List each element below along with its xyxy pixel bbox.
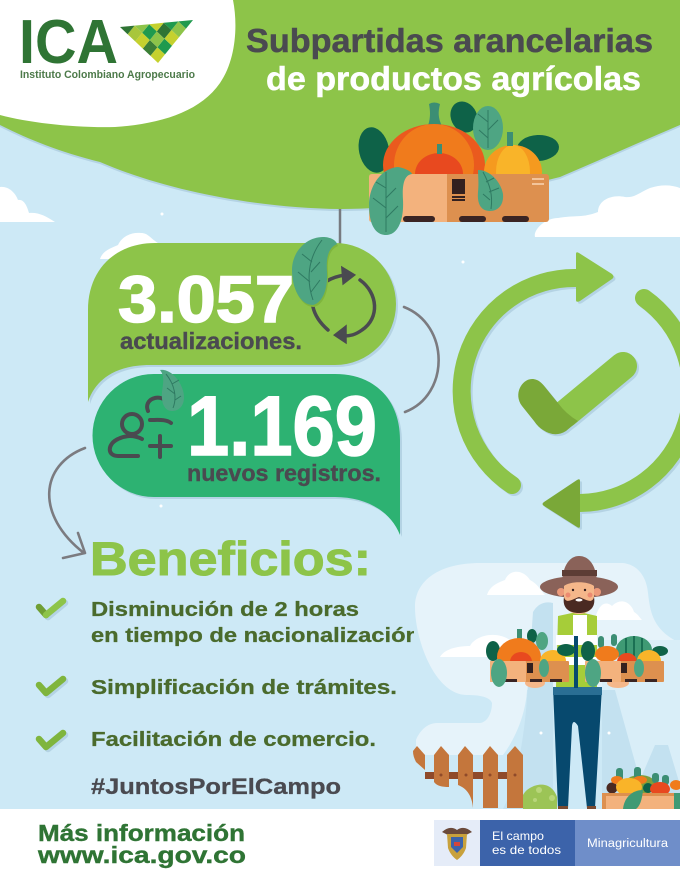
bubble: nuevos registros: 1.169 [187, 379, 377, 473]
trousers [553, 687, 602, 808]
bush [523, 785, 557, 809]
face [557, 588, 565, 596]
title [246, 22, 653, 97]
footer: Más información [38, 820, 245, 846]
logo [19, 8, 195, 81]
bubble: actualizaciones [88, 237, 396, 402]
hands [525, 678, 545, 688]
boots [558, 806, 596, 809]
ministry logo: El campo [492, 829, 544, 843]
big cycle icon with check [462, 252, 680, 528]
white logo blob [0, 0, 235, 127]
clouds [0, 185, 680, 259]
hashtag: #JuntosPorElCampo [91, 774, 341, 799]
connector top [339, 209, 341, 244]
hat crown [562, 556, 597, 582]
bubble: actualizaciones: actualizaciones. [120, 328, 302, 354]
bubble: nuevos registros [92, 370, 400, 535]
icon: leaf [292, 237, 337, 305]
title: Subpartidas arancelarias [246, 22, 653, 59]
benefits list: en tiempo de nacionalización [91, 624, 420, 647]
crate with pumpkins [355, 97, 560, 235]
bubble: actualizaciones: 3.057 [118, 262, 294, 336]
check icons [39, 601, 63, 747]
footer [0, 809, 680, 872]
right lower sky [602, 640, 680, 809]
footer: www.ica.gov.co [37, 842, 246, 868]
left crate [486, 629, 575, 687]
logo subtitle: Instituto Colombiano Agropecuario [20, 69, 195, 81]
ministry logo [434, 820, 680, 866]
pale background blob [415, 563, 680, 809]
mountains behind farmer [503, 602, 680, 809]
heading: Beneficios: Beneficios: [90, 532, 371, 585]
icon: users plus [110, 398, 171, 457]
right crate [581, 634, 668, 687]
connector: bubble 1 to bubble 2 [404, 307, 439, 412]
sparkles [160, 212, 610, 734]
farmer [486, 556, 668, 809]
header green shape [0, 0, 680, 209]
benefits list: Disminución de 2 horas [91, 598, 359, 621]
fence [413, 746, 523, 808]
bubble: nuevos registros: nuevos registros. [187, 460, 381, 486]
ministry logo: es de todos [492, 843, 561, 857]
hat brim [540, 576, 618, 598]
benefits list [91, 598, 420, 751]
logo wordmark: ICA [19, 8, 118, 77]
benefits list: Simplificación de trámites. [91, 676, 397, 699]
title: de productos agrícolas [266, 60, 641, 97]
benefits list: Facilitación de comercio. [91, 728, 376, 751]
logo emblem [120, 20, 193, 63]
vegetable crate lower right [602, 767, 680, 809]
ministry logo: Minagricultura [587, 838, 669, 850]
icon: refresh arrows [313, 269, 375, 341]
icon: small leaf [160, 370, 184, 411]
connector: bubble 2 to Beneficios [49, 448, 85, 558]
clouds behind farmer [440, 572, 642, 657]
icon: coat of arms [442, 828, 472, 860]
vest and shirt [556, 613, 597, 687]
